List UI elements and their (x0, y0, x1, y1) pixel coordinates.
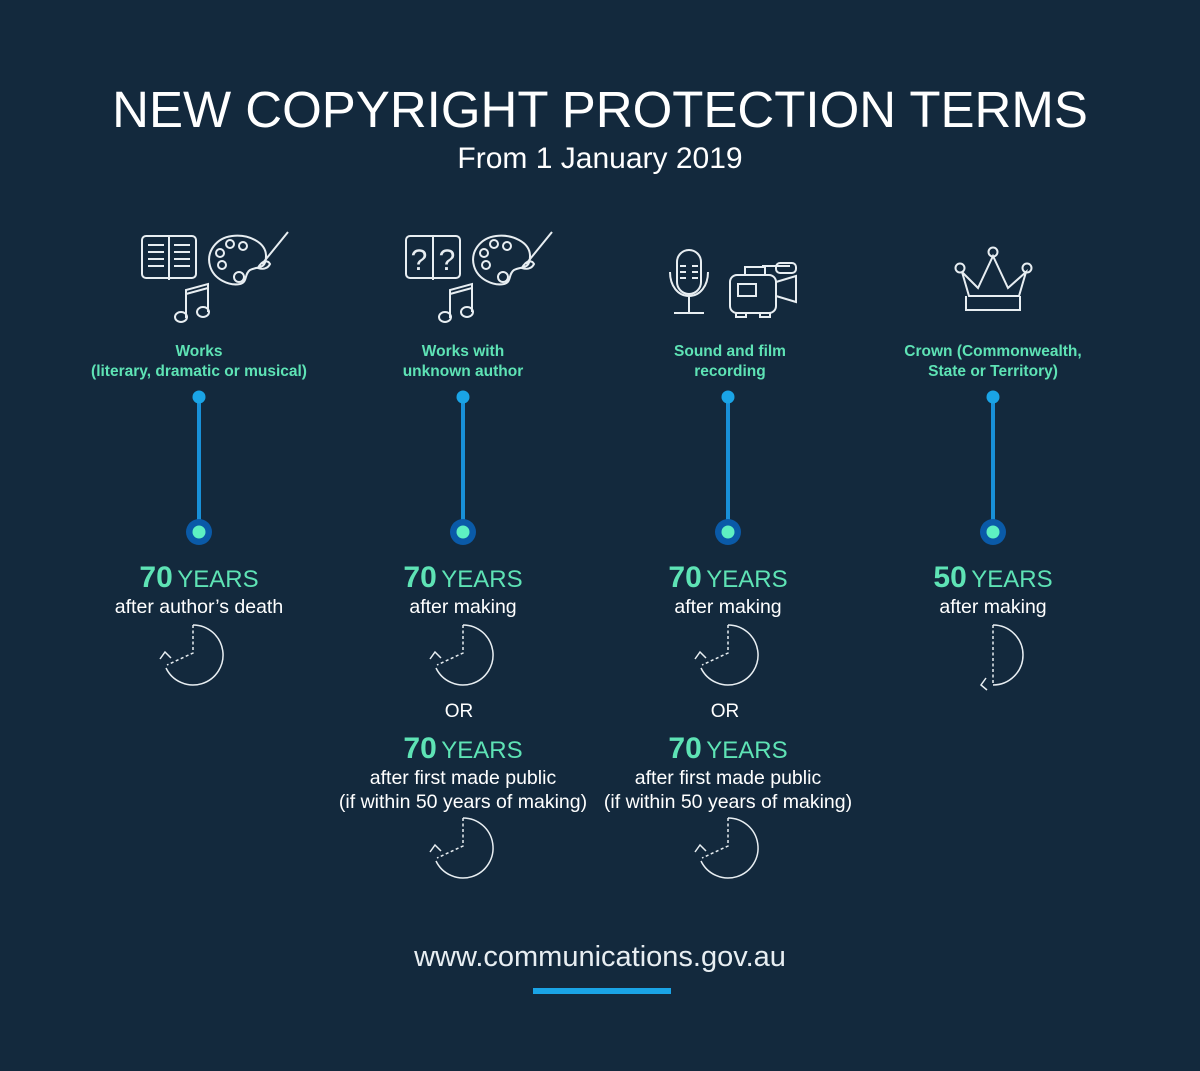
timelines (186, 390, 1006, 545)
clock 4 (981, 625, 1023, 690)
or 2: OR (711, 701, 739, 722)
label 1: (literary, dramatic or musical) (91, 363, 307, 380)
title: NEW COPYRIGHT PROTECTION TERMS (112, 81, 1088, 138)
term 2: after making (409, 596, 517, 618)
term 4: 50 YEARS (933, 561, 1053, 594)
icon: palette (209, 232, 288, 284)
term 1 (115, 561, 283, 618)
icon: palette 2 (473, 232, 552, 284)
icon: question book (406, 236, 460, 280)
clock 3 (695, 625, 758, 685)
term 4: after making (939, 596, 1047, 618)
clock 2 (430, 625, 493, 685)
label 4: Crown (Commonwealth, (904, 343, 1082, 360)
icon: book (142, 236, 196, 280)
subtitle: From 1 January 2019 (457, 142, 743, 175)
term 6: 70 YEARS (668, 732, 788, 765)
term 6 (604, 732, 852, 813)
label 4: State or Territory) (928, 363, 1058, 380)
label 1 (91, 343, 307, 380)
label 2: Works with (422, 343, 504, 360)
icon: question book: ? (411, 244, 427, 277)
or 1: OR (445, 701, 473, 722)
label 1: Works (175, 343, 223, 360)
label 3: Sound and film (674, 343, 786, 360)
icon: camera (730, 263, 796, 317)
term 4 (933, 561, 1053, 618)
label 4 (904, 343, 1082, 380)
term 3: 70 YEARS (668, 561, 788, 594)
term 2 (403, 561, 523, 618)
term 2: 70 YEARS (403, 561, 523, 594)
icon: microphone (670, 250, 708, 313)
term 5: (if within 50 years of making) (339, 791, 587, 813)
term 3 (668, 561, 788, 618)
term 1: 70 YEARS (139, 561, 259, 594)
term 5: after first made public (370, 767, 556, 789)
icon: music (175, 284, 209, 322)
icon: question book: ? (439, 244, 455, 277)
label 3: recording (694, 363, 766, 380)
clock 5 (430, 818, 493, 878)
term 6: (if within 50 years of making) (604, 791, 852, 813)
term 6: after first made public (635, 767, 821, 789)
term 3: after making (674, 596, 782, 618)
footer bar (533, 988, 671, 994)
clock 6 (695, 818, 758, 878)
term 5: 70 YEARS (403, 732, 523, 765)
label 2 (403, 343, 524, 380)
icon: music 2 (439, 284, 473, 322)
term 5 (339, 732, 587, 813)
footer url: www.communications.gov.au (414, 941, 786, 973)
term 1: after author’s death (115, 596, 283, 618)
label 2: unknown author (403, 363, 523, 380)
label 3 (674, 343, 786, 380)
clock 1 (160, 625, 223, 685)
icon: crown (956, 248, 1032, 310)
